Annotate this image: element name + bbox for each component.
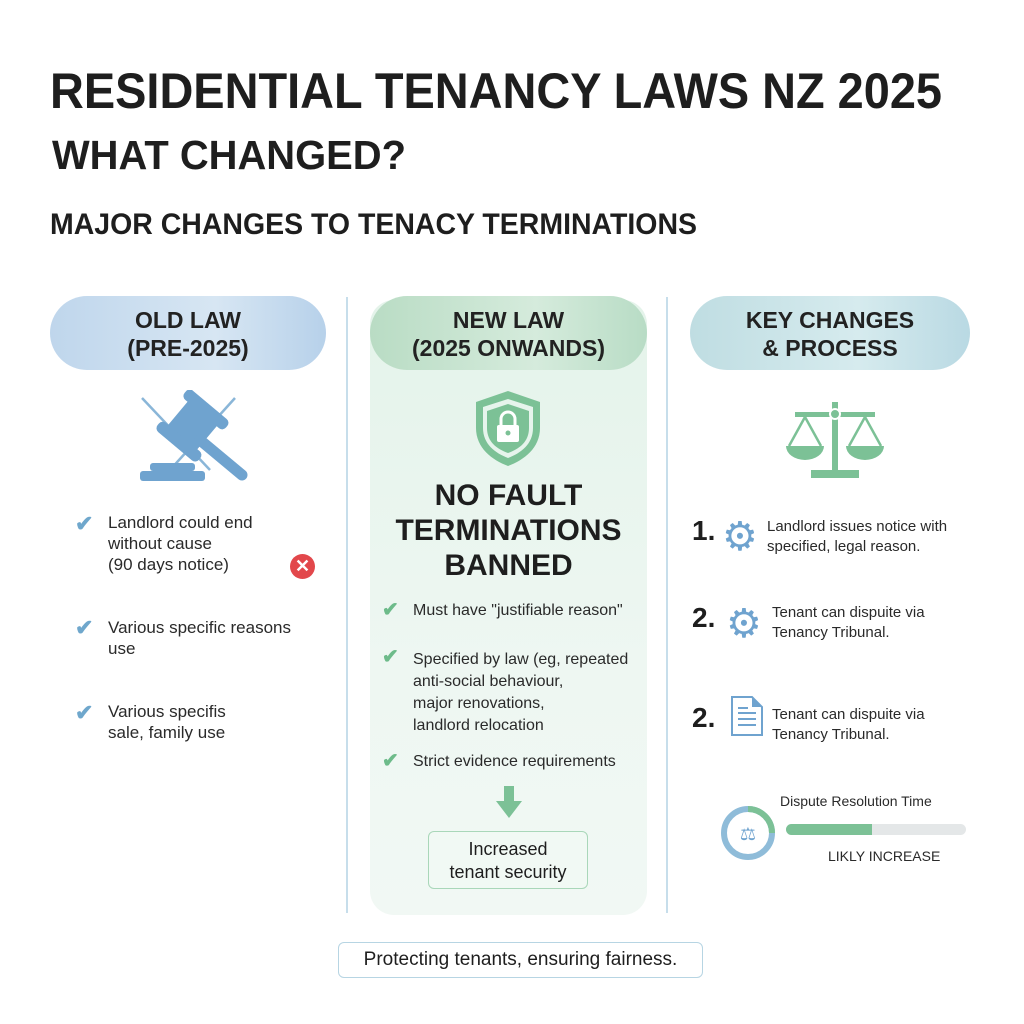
chart: dispute resolution time: ⚖ (740, 824, 756, 844)
heading: new law: (2025 ONWANDS) (412, 335, 605, 361)
callout: increased tenant security: tenant security (449, 862, 567, 882)
old law items: ✔ (75, 511, 93, 536)
process steps: 1. (692, 515, 715, 546)
icon: red x (290, 554, 315, 579)
old law items: Various specifis (108, 702, 226, 721)
new law items: Must have "justifiable reason" (413, 602, 623, 619)
process steps: ⚙ (726, 602, 762, 646)
chart: dispute resolution time: LIKLY INCREASE (828, 848, 940, 864)
icon: scales (786, 402, 884, 478)
heading: key changes: & PROCESS (762, 335, 898, 361)
icon: shield lock (476, 391, 540, 466)
panel: new law background (370, 300, 647, 915)
process steps: Tenant can dispuite via (772, 604, 925, 621)
title: RESIDENTIAL TENANCY LAWS NZ 2025 (50, 63, 942, 119)
heading: no fault terminations banned (395, 479, 622, 582)
chart: dispute resolution time: Dispute Resolution Time (780, 793, 932, 809)
old law items: Various specific reasons (108, 618, 291, 637)
old law items (75, 511, 315, 742)
title (50, 63, 942, 241)
process steps: Tenant can dispuite via (772, 706, 925, 723)
heading: new law (370, 296, 647, 370)
new law items: ✔ (382, 599, 399, 621)
process steps: Tenancy Tribunal. (772, 726, 890, 743)
old law items: ✔ (75, 615, 93, 640)
chart: dispute resolution time (721, 793, 966, 864)
heading: new law: NEW LAW (453, 307, 564, 333)
heading: key changes (690, 296, 970, 370)
new law items: ✔ (382, 750, 399, 772)
icon: document (731, 696, 763, 736)
heading: key changes: KEY CHANGES (746, 307, 914, 333)
new law items: major renovations, (413, 695, 545, 712)
old law items: use (108, 639, 135, 658)
process steps (692, 515, 947, 743)
new law items: anti-social behaviour, (413, 673, 563, 690)
new law items: Specified by law (eg, repeated (413, 651, 628, 668)
heading: old law: OLD LAW (135, 307, 241, 333)
process steps: specified, legal reason. (767, 538, 920, 555)
old law items: without cause (108, 534, 212, 553)
new law items (382, 599, 628, 772)
process steps: 2. (692, 702, 715, 733)
new law items: ✔ (382, 646, 399, 668)
callout: increased tenant security: Increased (468, 839, 548, 859)
process steps: ⚙ (722, 515, 758, 559)
footer caption (338, 942, 703, 978)
heading: old law (50, 296, 326, 370)
arrow: down (496, 786, 522, 818)
footer caption: Protecting tenants, ensuring fairness. (364, 949, 677, 970)
icon: gavel crossed (140, 390, 248, 481)
title: MAJOR CHANGES TO TENACY TERMINATIONS (50, 208, 697, 241)
title: WHAT CHANGED? (52, 132, 406, 178)
heading: no fault terminations banned: NO FAULT (435, 479, 582, 512)
process steps: Landlord issues notice with (767, 518, 947, 535)
dividers (346, 297, 348, 913)
heading: no fault terminations banned: BANNED (444, 549, 573, 582)
heading: no fault terminations banned: TERMINATIONS (395, 514, 622, 547)
old law items: (90 days notice) (108, 555, 229, 574)
new law items: landlord relocation (413, 717, 544, 734)
heading: old law: (PRE-2025) (127, 335, 249, 361)
old law items: sale, family use (108, 723, 225, 742)
new law items: Strict evidence requirements (413, 753, 616, 770)
process steps: Tenancy Tribunal. (772, 624, 890, 641)
old law items: ✔ (75, 700, 93, 725)
old law items: Landlord could end (108, 513, 253, 532)
process steps: 2. (692, 602, 715, 633)
icon: red x: ✕ (295, 556, 310, 576)
callout: increased tenant security (428, 831, 588, 889)
